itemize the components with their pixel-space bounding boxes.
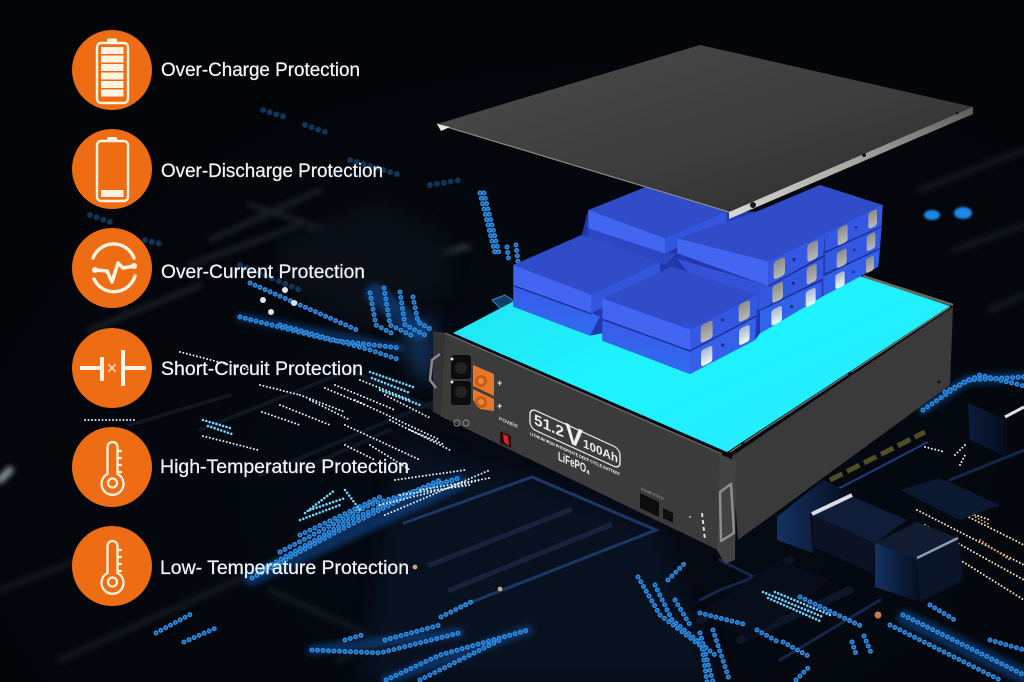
left handle bbox=[430, 354, 440, 388]
communication ports bbox=[640, 487, 705, 540]
terminal posts bbox=[450, 355, 502, 426]
dim ring traces bbox=[90, 110, 460, 290]
communication ports: RS485 RS232 bbox=[641, 487, 664, 501]
blurred blue glow beneath traces bbox=[240, 293, 1024, 680]
protection item: short-circuit: Short-Circuit Protection bbox=[161, 359, 363, 380]
top cover plate bbox=[437, 45, 973, 219]
protection item: over-current: Over-Current Protection bbox=[161, 262, 365, 283]
icon: thermometer bbox=[102, 541, 124, 594]
front stack bbox=[602, 267, 757, 374]
white and cyan dot rows bbox=[85, 352, 1024, 621]
protection item: high temperature: High-Temperature Protection bbox=[160, 457, 409, 478]
protection item: over-discharge: Over-Discharge Protection bbox=[161, 161, 383, 182]
terminal posts: + bbox=[497, 378, 502, 388]
left stack bbox=[513, 235, 660, 336]
tray rim bbox=[863, 276, 953, 305]
battery chassis bbox=[430, 225, 953, 564]
icon: low battery bbox=[97, 137, 128, 201]
back-right stack bbox=[757, 185, 883, 296]
plate front edge strip bbox=[729, 107, 973, 219]
front panel bbox=[440, 333, 722, 551]
right rack ear bbox=[717, 454, 736, 564]
back-left cell bbox=[588, 187, 727, 265]
board components behind battery bbox=[777, 403, 1024, 602]
chip block A bbox=[777, 480, 850, 553]
voltage badge: V bbox=[565, 417, 583, 456]
left rack ear bbox=[433, 331, 445, 416]
terminal posts: + bbox=[497, 401, 502, 411]
protection item: over-charge: Over-Charge Protection bbox=[161, 60, 360, 81]
power switch: POWER bbox=[499, 416, 518, 430]
voltage badge bbox=[530, 408, 620, 477]
board frame lines bbox=[130, 370, 1024, 660]
power switch bbox=[499, 416, 518, 448]
side panel bbox=[732, 307, 953, 540]
icon: open circuit bbox=[80, 350, 146, 386]
icon: thermometer bbox=[102, 442, 124, 495]
cell block backing bbox=[513, 185, 883, 374]
battery cells bbox=[513, 185, 883, 374]
protection item: over-discharge bbox=[72, 129, 383, 209]
cell terminals bbox=[701, 209, 877, 367]
protection item: short-circuit bbox=[72, 328, 363, 408]
glass box by the cells bbox=[492, 295, 515, 310]
chip block B bbox=[813, 497, 907, 573]
right handle bbox=[720, 484, 734, 541]
icon: full battery bbox=[97, 38, 128, 103]
blue ring traces bbox=[156, 193, 1024, 682]
chip block C bbox=[875, 522, 964, 602]
voltage badge: 100Ah bbox=[583, 437, 618, 466]
icon: current pulse bbox=[92, 244, 137, 292]
gold connector ladder bbox=[830, 432, 925, 480]
bright blue glow spots bbox=[924, 207, 972, 220]
voltage badge: LiFePO₄ bbox=[558, 449, 590, 477]
centre-right stack bbox=[677, 212, 825, 333]
voltage badge: 51.2 bbox=[534, 412, 564, 442]
protection item: over-charge bbox=[72, 30, 360, 110]
glowing cyan tray bbox=[453, 225, 950, 452]
glowing white board dots bbox=[260, 287, 882, 618]
protection item: low temperature: Low- Temperature Protection bbox=[160, 558, 409, 579]
protection item: over-current bbox=[72, 228, 365, 308]
dim board structures bbox=[0, 150, 1024, 660]
voltage badge: LITHIUM IRON PHOSPHATE DEEP CYCLE BATTERY bbox=[530, 431, 620, 477]
protection item: low temperature bbox=[72, 526, 409, 606]
protection item: high temperature bbox=[72, 427, 409, 507]
